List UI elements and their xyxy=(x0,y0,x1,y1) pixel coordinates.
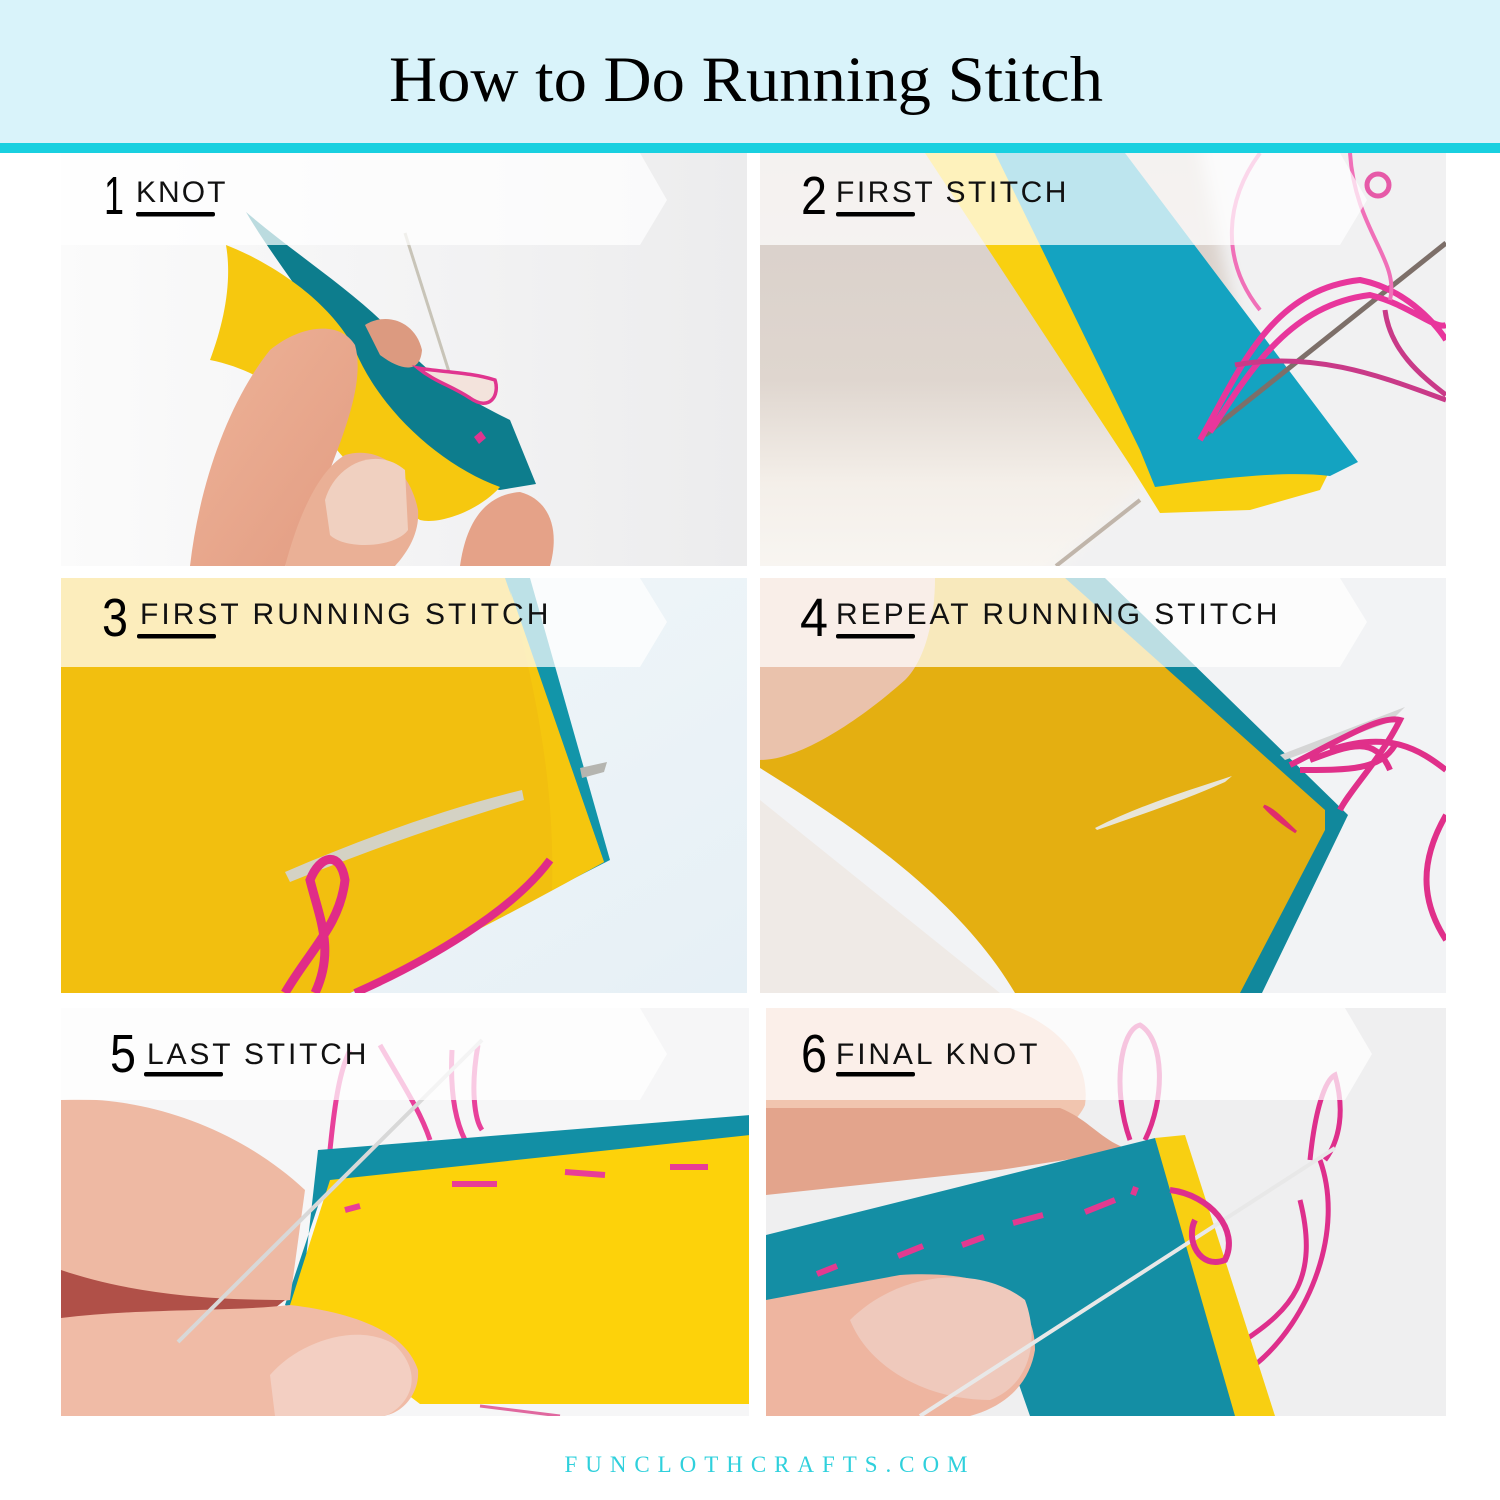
ribbon 6 xyxy=(766,1008,1372,1100)
panel 1: knot photo xyxy=(190,153,747,566)
step 2 label: 2 xyxy=(801,166,827,226)
step 4 label: 4 xyxy=(800,588,828,648)
ribbon 1 xyxy=(61,153,667,245)
step 4 label xyxy=(800,588,1281,648)
ribbon 2 xyxy=(760,153,1367,245)
step 6 label: FINAL KNOT xyxy=(836,1038,1041,1071)
step 1 label xyxy=(104,166,229,226)
step 5 label xyxy=(110,1024,370,1084)
step 3 label: FIRST RUNNING STITCH xyxy=(140,598,552,631)
step 3 label: 3 xyxy=(102,588,128,648)
panel 6: final knot photo xyxy=(766,1008,1446,1416)
ribbon 5 xyxy=(61,1008,667,1100)
title: How to Do Running Stitch xyxy=(389,44,1103,116)
step 4 label: REPEAT RUNNING STITCH xyxy=(836,598,1281,631)
panel 5: last stitch photo xyxy=(61,1008,750,1416)
panel 3: first running stitch photo xyxy=(61,578,747,993)
ribbon 3 xyxy=(61,578,667,667)
step 6 label xyxy=(801,1024,1041,1084)
step 5 label: LAST STITCH xyxy=(147,1038,370,1071)
footer website: FUNCLOTHCRAFTS.COM xyxy=(564,1452,968,1477)
panel 4: repeat running stitch photo xyxy=(760,578,1446,993)
step 5 label: 5 xyxy=(110,1024,136,1084)
panel 2: first stitch photo xyxy=(760,153,1446,566)
step 3 label xyxy=(102,588,552,648)
step 1 label: KNOT xyxy=(136,176,229,209)
step 2 label xyxy=(801,166,1070,226)
step 6 label: 6 xyxy=(801,1024,827,1084)
ribbon 4 xyxy=(760,578,1367,667)
step 1 label: 1 xyxy=(104,166,124,226)
step 2 label: FIRST STITCH xyxy=(836,176,1070,209)
header banner xyxy=(0,0,1500,153)
